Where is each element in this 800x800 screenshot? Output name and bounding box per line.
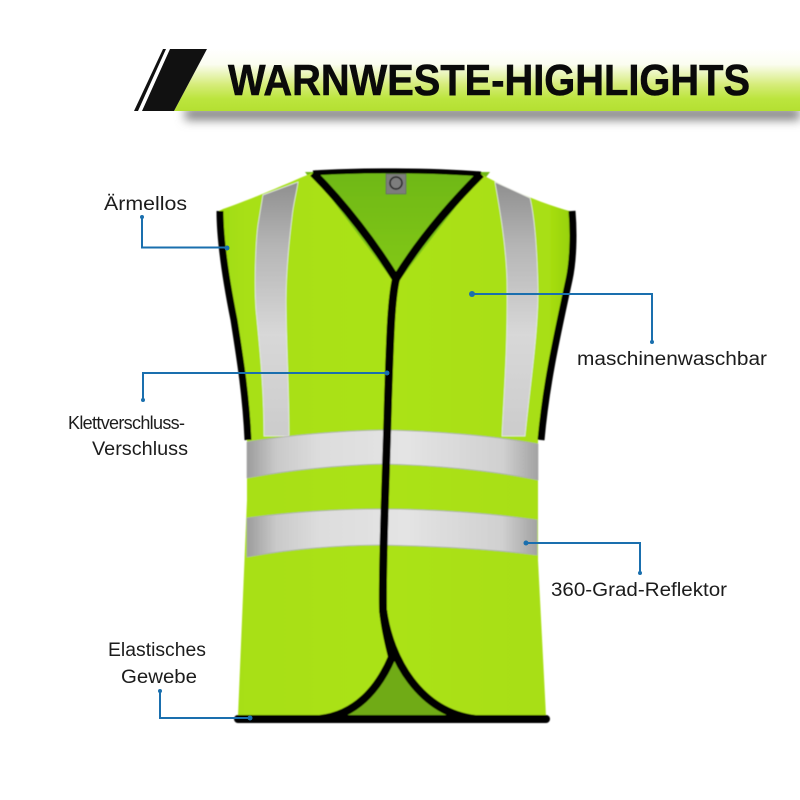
title: WARNWESTE-HIGHLIGHTS [228, 56, 750, 105]
callout: 360-Grad-Reflektor [524, 540, 728, 601]
neck label [386, 174, 406, 194]
hem opening [320, 655, 475, 719]
black binding [238, 171, 546, 719]
shoulder reflector right [495, 182, 538, 436]
upper reflective belt [247, 430, 538, 480]
callout: Klettverschluss-Verschluss [68, 370, 390, 460]
lower reflective belt [247, 509, 537, 557]
callout: maschinenwaschbar: maschinenwaschbar [577, 349, 768, 370]
armhole binding [220, 211, 573, 440]
callout: Ärmellos [104, 194, 230, 250]
callout: Elastisches Gewebe [108, 640, 252, 720]
callout: maschinenwaschbar [469, 291, 768, 370]
callout: Klettverschluss-Verschluss: Verschluss [92, 439, 188, 460]
safety vest illustration [217, 171, 574, 719]
callout: Klettverschluss-Verschluss: Klettverschluss- [68, 413, 185, 433]
callout: Elastisches Gewebe: Elastisches [108, 640, 206, 661]
callout: Elastisches Gewebe: Gewebe [121, 667, 197, 688]
title banner [134, 49, 800, 120]
callout: Ärmellos: Ärmellos [104, 194, 187, 215]
shoulder reflector left [255, 182, 298, 436]
callout: 360-Grad-Reflektor: 360-Grad-Reflektor [551, 580, 728, 601]
